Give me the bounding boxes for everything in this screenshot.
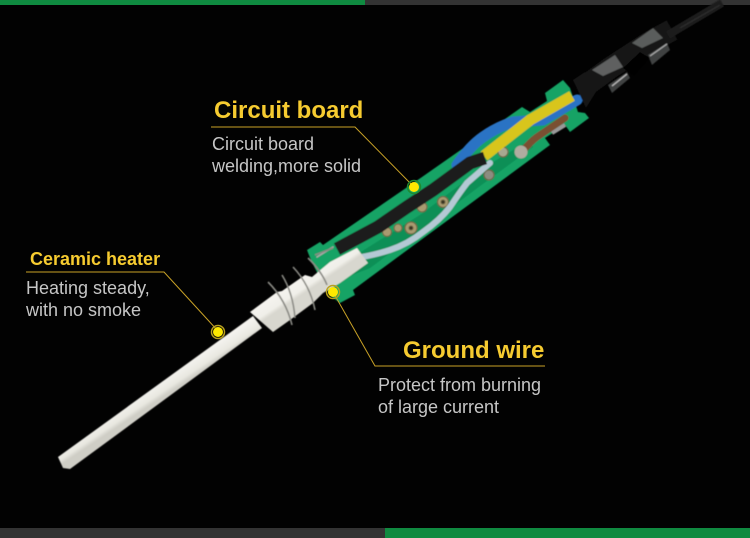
text: circuit board: welding,more solid [212,156,361,176]
text: circuit board [212,134,361,176]
spring [268,248,333,325]
solder pads [382,147,508,236]
wires [317,96,577,257]
heading: ceramic heater: Ceramic heater [30,249,160,269]
text: ground wire: Protect from burning [378,375,541,395]
bottom bar [0,528,750,538]
text: ceramic heater: Heating steady, [26,278,150,298]
text: ground wire: of large current [378,397,499,417]
text: ceramic heater: with no smoke [26,300,141,320]
black cable sleeve [573,72,596,108]
circuit board [307,80,589,303]
ceramic heater [58,248,368,469]
marker dots [212,180,420,338]
cable [580,3,722,93]
silver terminal [552,125,565,133]
leader lines [26,127,545,366]
top bar [0,0,750,5]
text: ground wire [378,375,541,417]
heading: ground wire: Ground wire [403,337,544,364]
text: circuit board: Circuit board [212,134,314,154]
text: ceramic heater [26,278,150,320]
heading: circuit board: Circuit board [214,97,363,124]
